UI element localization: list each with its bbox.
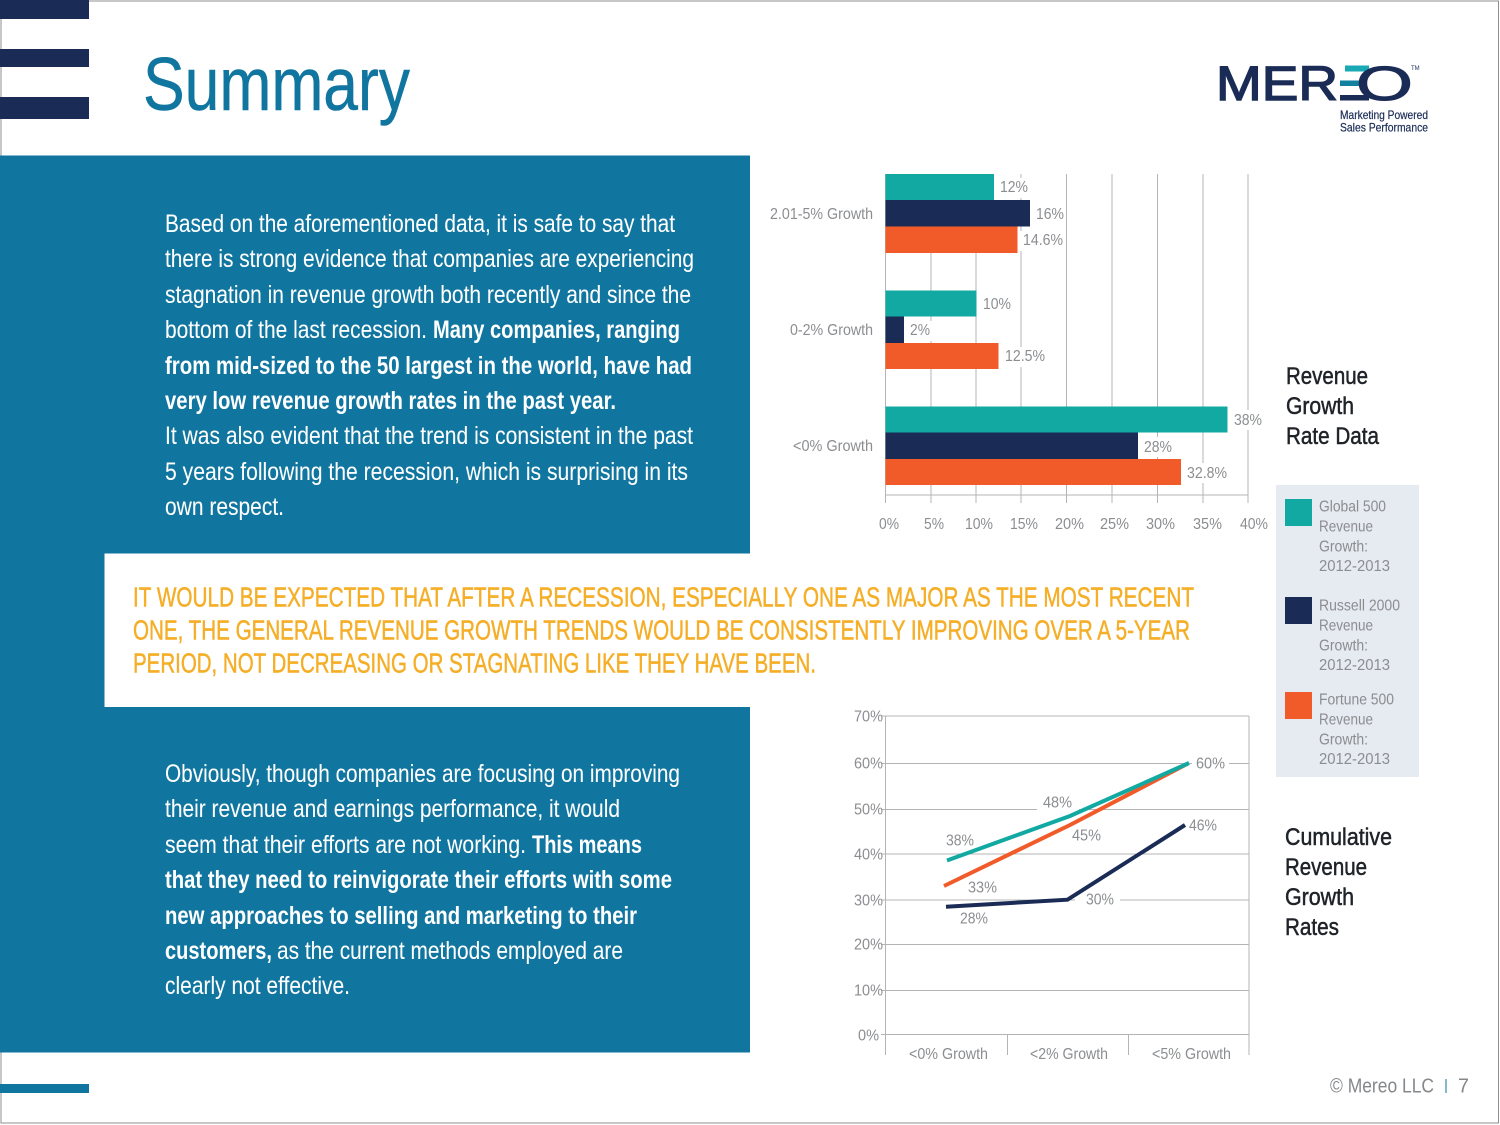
data labels: 48% [1043, 794, 1072, 812]
x axis labels: 30% [1146, 516, 1175, 533]
title: Summary [143, 42, 410, 126]
logo: Mereo: O [1356, 58, 1413, 111]
heading: cumulative revenue growth rates: Cumulative [1285, 824, 1392, 851]
text block: first paragraph: Based on the aforementioned data, it is safe to say that [165, 210, 675, 238]
label masks [942, 755, 1229, 908]
line: Fortune 500 [944, 764, 1188, 886]
text block: second paragraph: customers, [165, 937, 272, 965]
text block: first paragraph: from mid-sized to the 50 largest in the world, have had [165, 352, 692, 380]
legend item: Russell 2000: 2012-2013 [1319, 657, 1390, 674]
text block: first paragraph: 5 years following the recession, which is surprising in its [165, 458, 688, 486]
category labels: <0% Growth [793, 438, 873, 455]
value labels: 38% [1234, 412, 1262, 429]
legend item: Russell 2000: Russell 2000 [1319, 598, 1400, 614]
x axis labels [879, 516, 1268, 533]
line chart: cumulative revenue growth rates [854, 708, 1249, 1063]
x axis labels: 40% [1240, 516, 1268, 533]
legend item: Fortune 500: Growth: [1319, 732, 1368, 748]
value labels: 16% [1036, 206, 1064, 223]
y axis labels: 40% [854, 846, 883, 864]
heading: revenue growth rate data: Growth [1286, 393, 1354, 420]
text block: second paragraph: seem that their efforts are not working. [165, 831, 526, 859]
legend item: Global 500: Global 500 [1319, 498, 1386, 516]
text block: second paragraph: This means [532, 831, 642, 859]
heading: cumulative revenue growth rates: Rates [1285, 914, 1339, 941]
bar chart: revenue growth rate data [770, 174, 1268, 533]
legend item: Fortune 500: Fortune 500 [1319, 692, 1394, 708]
heading: cumulative revenue growth rates: Revenue [1285, 854, 1367, 881]
data labels: 46% [1189, 818, 1217, 834]
legend item: Global 500: Growth: [1319, 538, 1368, 556]
logo: Mereo: MER [1216, 58, 1338, 111]
text block: first paragraph: bottom of the last recession. [165, 316, 427, 344]
text block: first paragraph: very low revenue growth rates in the past year. [165, 387, 616, 415]
legend [1276, 485, 1419, 777]
text block: first paragraph [165, 210, 694, 521]
heading: cumulative revenue growth rates [1285, 824, 1392, 941]
bars: 2.01-5% growth [886, 174, 1030, 253]
data labels: 30% [1086, 892, 1114, 908]
category labels: <5% Growth [1152, 1046, 1231, 1063]
panel: blue background [0, 156, 750, 1052]
value labels: 2% [910, 322, 930, 339]
logo: Mereo [1216, 58, 1428, 134]
category labels: 2.01-5% Growth [770, 206, 873, 223]
category labels: 0-2% Growth [790, 322, 873, 339]
bars: below 0% growth [886, 406, 1228, 485]
value labels: 12% [1000, 179, 1028, 196]
y axis labels: 70% [854, 708, 883, 726]
data labels: 28% [960, 910, 988, 928]
heading: revenue growth rate data: Rate Data [1286, 423, 1380, 450]
legend item: Russell 2000: Revenue [1319, 618, 1373, 634]
y axis labels: 20% [854, 936, 883, 954]
x axis labels: 10% [965, 516, 993, 533]
text block: second paragraph: that they need to reinvigorate their efforts with some [165, 866, 672, 894]
text block: first paragraph: It was also evident that the trend is consistent in the past [165, 422, 693, 450]
category labels: <0% Growth [909, 1046, 988, 1063]
heading: revenue growth rate data [1286, 363, 1380, 450]
legend item: Global 500 [1285, 498, 1390, 575]
x axis labels: 20% [1055, 516, 1084, 533]
bars: 0-2% growth [886, 290, 998, 369]
legend item: Fortune 500: Revenue [1319, 712, 1373, 728]
text block: first paragraph: Many companies, ranging [433, 316, 680, 344]
footer: copyright and page number: 7 [1458, 1076, 1469, 1098]
logo: Mereo: Sales Performance [1340, 120, 1428, 134]
text block: first paragraph: own respect. [165, 493, 284, 521]
text block: second paragraph: clearly not effective. [165, 972, 350, 1000]
category labels [770, 206, 873, 455]
y axis labels: 10% [854, 982, 883, 1000]
y axis labels: 50% [854, 802, 883, 818]
data labels: 33% [968, 880, 997, 896]
data labels: 60% [1196, 756, 1225, 772]
y axis labels: 0% [858, 1028, 879, 1044]
logo: Mereo: TM [1411, 66, 1420, 72]
heading: cumulative revenue growth rates: Growth [1285, 884, 1354, 911]
text block: second paragraph: Obviously, though companies are focusing on improving [165, 760, 680, 788]
y axis labels [854, 708, 883, 1044]
line: Global 500 [947, 763, 1189, 860]
legend item: Fortune 500: 2012-2013 [1319, 751, 1390, 768]
line: Russell 2000 [946, 825, 1185, 907]
value labels: 10% [983, 296, 1011, 313]
logo: Mereo: Marketing Powered [1340, 108, 1428, 122]
y axis labels: 60% [854, 756, 883, 772]
value labels: 12.5% [1005, 348, 1045, 365]
y axis labels: 30% [854, 892, 883, 910]
legend item: Fortune 500 [1285, 692, 1394, 768]
value labels: 32.8% [1187, 465, 1227, 482]
text block: first paragraph: stagnation in revenue growth both recently and since the [165, 281, 691, 309]
text block: second paragraph: as the current methods employed are [277, 937, 623, 965]
footer: copyright and page number: © Mereo LLC [1330, 1076, 1434, 1098]
data labels: 38% [946, 832, 974, 850]
x axis labels: 5% [924, 516, 944, 533]
category labels: <2% Growth [1030, 1046, 1108, 1063]
data labels: 45% [1072, 828, 1101, 844]
text block: second paragraph: new approaches to selling and marketing to their [165, 902, 637, 930]
x axis labels: 25% [1100, 516, 1129, 533]
x axis labels: 35% [1193, 516, 1222, 533]
value labels [905, 178, 1266, 483]
heading: revenue growth rate data: Revenue [1286, 363, 1368, 390]
category labels [909, 1046, 1231, 1063]
callout: white box with yellow statement: PERIOD, NOT DECREASING OR STAGNATING LIKE THEY HAVE BEEN. [133, 648, 816, 678]
value labels: 28% [1144, 439, 1172, 456]
data labels [946, 756, 1225, 928]
text block: second paragraph: their revenue and earnings performance, it would [165, 795, 620, 823]
callout: white box with yellow statement [104, 554, 1270, 707]
legend item: Russell 2000 [1285, 597, 1400, 674]
decorative header bars [0, 0, 89, 119]
text block: first paragraph: there is strong evidence that companies are experiencing [165, 245, 694, 273]
value labels: 14.6% [1023, 232, 1063, 249]
legend item: Global 500: Revenue [1319, 518, 1373, 536]
legend item: Russell 2000: Growth: [1319, 638, 1368, 654]
legend item: Global 500: 2012-2013 [1319, 558, 1390, 575]
decorative footer bar [0, 1084, 89, 1093]
x axis labels: 15% [1010, 516, 1038, 533]
text block: second paragraph [165, 760, 680, 1000]
x axis labels: 0% [879, 516, 899, 533]
